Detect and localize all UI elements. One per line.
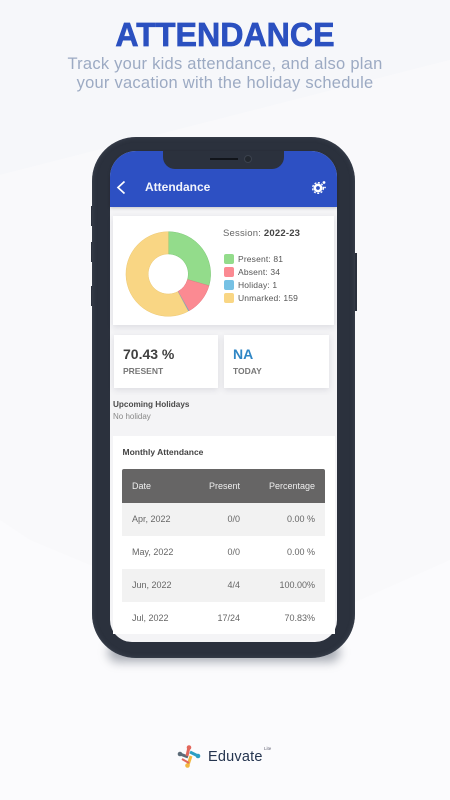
today value: NA [233,346,253,362]
legend: absent: Absent: 34 [238,267,280,277]
panel: session summary [113,216,334,325]
table row: May: 0.00 % [287,547,315,557]
panel: monthly attendance [113,436,335,634]
header title: Attendance [145,180,210,194]
table row: April: Apr, 2022 [132,514,171,524]
table row: May: 0/0 [227,547,240,557]
app header bar [110,151,337,207]
legend [224,254,298,303]
phone right button [354,253,357,311]
table row: July [122,602,325,634]
donut chart [126,231,211,316]
camera [244,155,252,163]
table row: June [122,569,325,602]
legend: unmarked: Unmarked: 159 [238,293,298,303]
legend: holiday: Holiday: 1 [238,280,277,290]
logo wordmark: Eduvate [208,749,263,765]
phone screen background [110,151,337,642]
table row: July: 70.83% [284,613,315,623]
logo superscript: Lite [264,746,271,751]
no holiday text: No holiday [113,412,151,421]
subtitle: Track your kids attendance, and also plan [67,55,383,73]
today label: TODAY [233,366,262,376]
legend: present: Present: 81 [238,254,283,264]
table header [122,469,325,503]
table row: June: 100.00% [279,580,315,590]
back arrow icon [116,180,125,194]
phone [91,137,357,668]
table header: Present [209,481,240,491]
speaker [210,158,238,160]
subtitle [67,55,383,92]
table row: July: Jul, 2022 [132,613,169,623]
present value: 70.43 % [123,346,174,362]
monthly attendance heading: Monthly Attendance [122,446,203,456]
present label: PRESENT [123,366,163,376]
table row: April: 0/0 [227,514,240,524]
icon: logo mark [178,745,200,768]
panel: present stat [114,335,218,388]
notch [163,151,284,169]
panel: today stat [224,335,329,388]
title: ATTENDANCE [115,17,335,54]
phone body [92,137,355,658]
side buttons [91,206,94,226]
table row: May [122,536,325,569]
subtitle: your vacation with the holiday schedule [77,74,373,92]
table row: June: 4/4 [227,580,240,590]
table row: June: Jun, 2022 [132,580,172,590]
table header: Date [132,481,151,491]
table header: Percentage [269,481,315,491]
table row: April: 0.00 % [287,514,315,524]
phone shadow [108,642,340,662]
icon: settings gears [312,181,326,194]
session label: Session: 2022-23 [223,228,300,239]
table row: May: May, 2022 [132,547,173,557]
table row: July: 17/24 [217,613,240,623]
logo: Eduvate [178,745,271,768]
upcoming holidays heading: Upcoming Holidays [113,400,189,408]
table row: April [122,503,325,536]
